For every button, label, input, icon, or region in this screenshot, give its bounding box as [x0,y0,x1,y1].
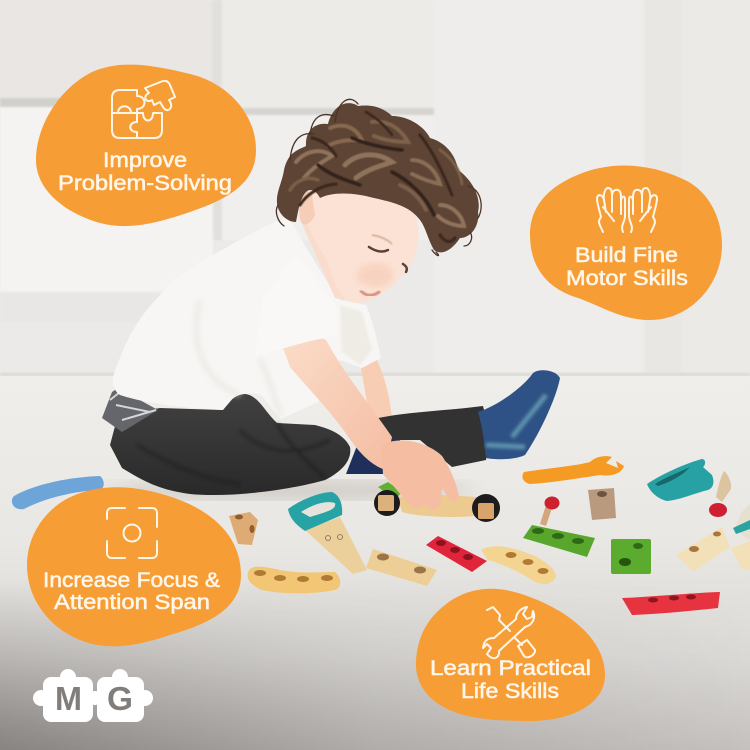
panel: build fine motor skills [530,165,722,320]
toy: red trapezoid [622,592,720,615]
text: increase focus: Increase Focus & [43,569,220,592]
text: motor skills: Motor Skills [566,267,688,290]
toy: green plate [523,525,595,557]
sock [478,370,560,459]
toy: green cube [611,539,651,574]
text: problem-solving: Problem-Solving [58,172,232,195]
panel: increase focus and attention span [27,487,241,646]
toy: red peg [540,496,560,526]
hair [276,99,481,256]
toy: small wooden cube [229,512,258,545]
toy: car [374,441,500,522]
toy: red plate [426,536,487,572]
shirt [113,217,381,419]
hand [382,441,459,510]
cheek [357,263,393,287]
sleeve edge [255,255,338,356]
text: attention span: Attention Span [54,591,210,614]
text: improve: Improve [103,149,187,172]
text: build fine: Build Fine [575,244,678,267]
eyebrows [372,235,392,244]
toy: light wooden connector [676,504,750,572]
sock trim [486,395,546,447]
toy: orange wrench [522,456,624,484]
shadow under child [105,481,475,499]
icon: open hands [597,188,657,232]
icon: crossed tools [483,607,535,658]
shirt shading [340,305,372,365]
icon: focus frame [107,508,157,558]
toy: brown cube [588,488,616,520]
toy: yellow curved piece two [481,546,556,584]
mouth [361,291,379,295]
waistband [102,388,158,432]
toy: yellow curved plate [248,567,340,593]
panel: learn practical life skills [416,589,605,721]
toy: teal clamp [647,459,713,501]
navy sock under leg [346,438,410,474]
panel: improve problem-solving [36,65,256,226]
far arm [360,358,392,432]
toy: small hammer [709,471,731,517]
icon: puzzle [112,81,175,138]
neck [298,200,345,300]
child [102,99,560,510]
text: learn practical: Learn Practical [430,657,591,680]
toy: blue curved piece [12,476,104,509]
toy: wooden plank [366,549,437,586]
jeans folds [137,423,330,484]
near arm [283,338,392,470]
logo: MG puzzle pieces: M [55,680,82,717]
logo: MG puzzle pieces [33,669,153,722]
text: life skills: Life Skills [461,680,559,703]
toy: saw [288,492,367,574]
near leg jeans [110,394,350,495]
far leg jeans [370,406,487,467]
eyes [369,247,407,272]
head [303,185,419,303]
ear [299,190,315,224]
logo: MG puzzle pieces: G [107,680,133,717]
